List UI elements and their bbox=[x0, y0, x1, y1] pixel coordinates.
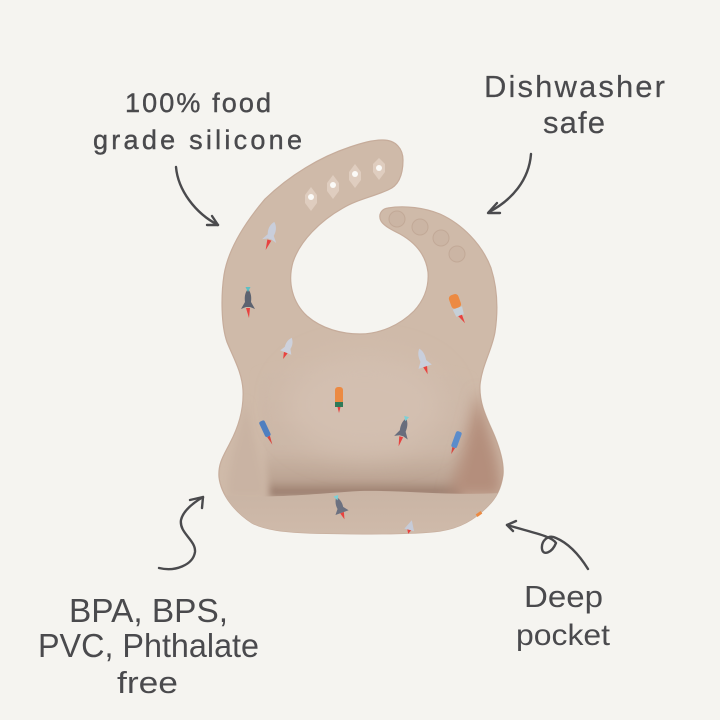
label: Deep pocket: Deep bbox=[524, 579, 603, 614]
snap buttons bbox=[389, 211, 465, 262]
label: 100% food grade silicone: 100% food bbox=[125, 88, 271, 118]
arrow: dishwasher bbox=[488, 154, 531, 213]
pocket front lip bbox=[226, 490, 498, 534]
label: 100% food grade silicone: grade silicone bbox=[93, 125, 302, 155]
label: Dishwasher safe bbox=[484, 69, 665, 140]
label: Deep pocket: pocket bbox=[516, 619, 611, 652]
strap holes bbox=[305, 158, 385, 211]
arrow: silicone bbox=[176, 167, 218, 225]
pocket shading bbox=[226, 395, 503, 534]
label: Dishwasher safe: safe bbox=[543, 105, 605, 140]
bib product photo bbox=[215, 140, 510, 540]
arrow: BPA free bbox=[159, 497, 203, 569]
label: 100% food grade silicone bbox=[93, 88, 302, 155]
label: BPA, BPS, PVC, Phthalate free bbox=[38, 592, 259, 700]
arrow: deep pocket bbox=[507, 521, 588, 569]
label: Dishwasher safe: Dishwasher bbox=[484, 69, 665, 104]
label: BPA, BPS, PVC, Phthalate free: BPA, BPS, bbox=[69, 592, 228, 629]
rocket prints bbox=[241, 220, 482, 535]
bib body silhouette bbox=[219, 140, 503, 534]
label: Deep pocket bbox=[516, 579, 611, 652]
label: BPA, BPS, PVC, Phthalate free: free bbox=[117, 665, 178, 700]
label: BPA, BPS, PVC, Phthalate free: PVC, Phthalate bbox=[38, 627, 259, 664]
